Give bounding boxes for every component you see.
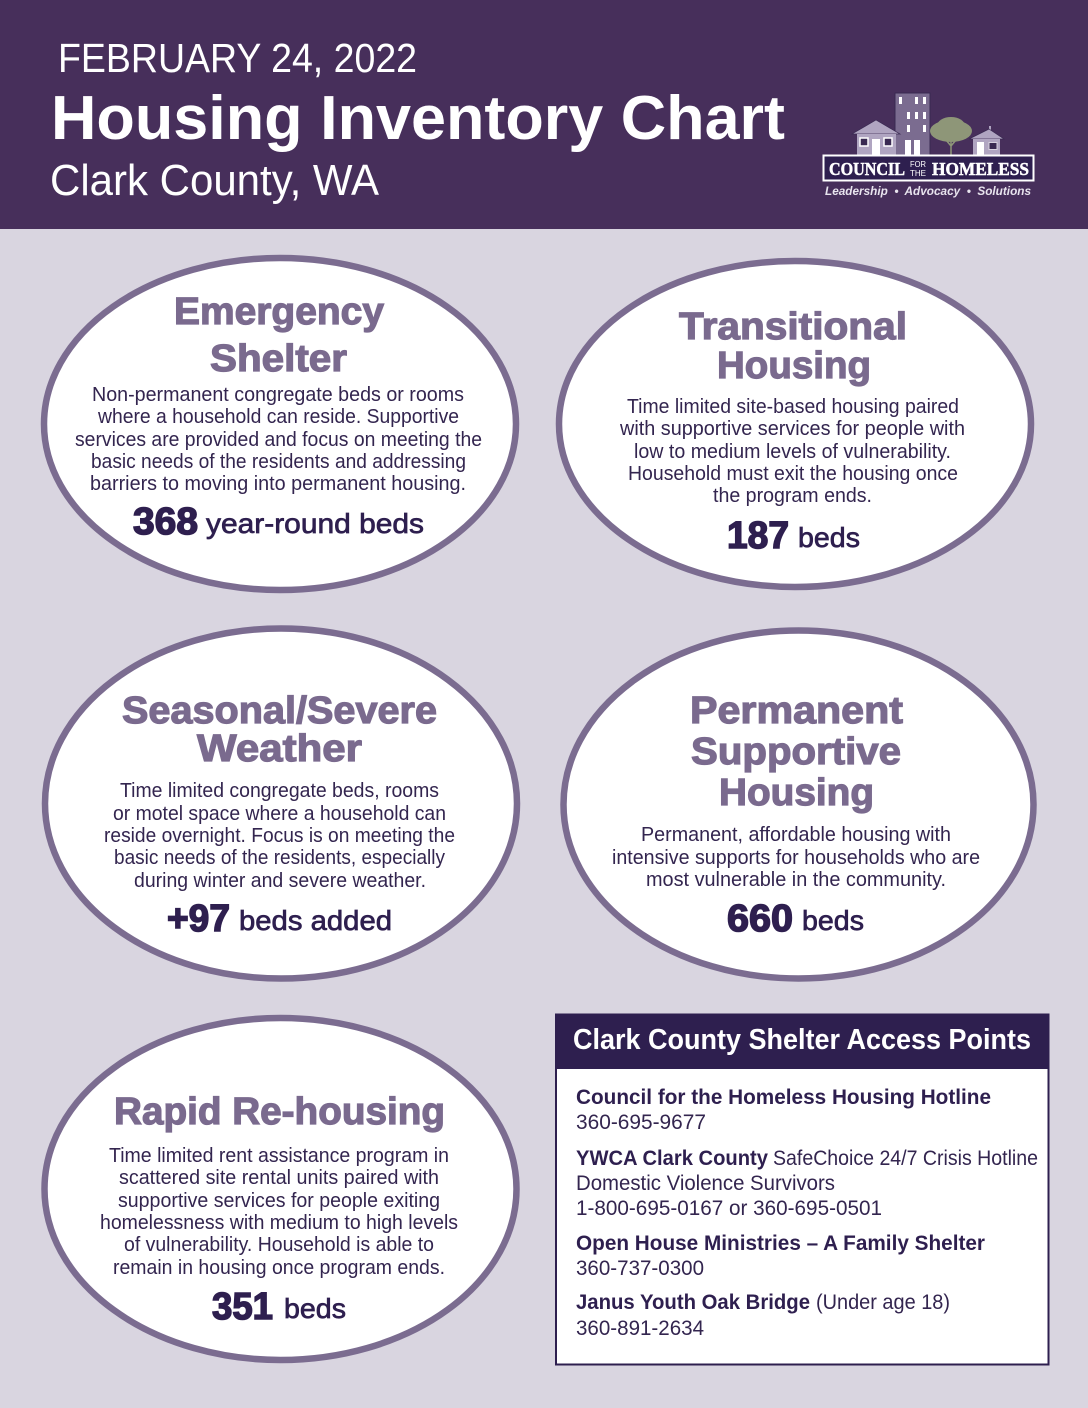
heading: Housing: [717, 345, 871, 387]
contact: Janus Youth Oak Bridge: [576, 1291, 950, 1340]
stat: 187 beds: beds: [798, 522, 860, 553]
description: or motel space where a household can: [113, 803, 446, 825]
panel: Transitional Housing: [559, 261, 1031, 587]
description: supportive services for people exiting: [118, 1190, 440, 1212]
stat: 660 beds: [727, 898, 864, 940]
panel: Emergency Shelter: [44, 258, 516, 590]
logo: Council for the Homeless: [824, 93, 1034, 198]
heading: Weather: [197, 728, 362, 770]
stat: 368 year-round beds: year-round beds: [206, 508, 424, 539]
heading: Transitional: [679, 306, 907, 348]
description: barriers to moving into permanent housing.: [90, 473, 466, 495]
heading: Seasonal/Severe: [122, 690, 437, 732]
description: where a household can reside. Supportive: [97, 406, 459, 428]
stat: 368 year-round beds: 368: [133, 501, 198, 543]
description: basic needs of the residents, especially: [114, 847, 445, 869]
contact: YWCA Clark County: Domestic Violence Survivors: [576, 1172, 835, 1195]
description: the program ends.: [713, 485, 872, 507]
description: [100, 1145, 458, 1279]
description: [104, 780, 455, 892]
contact: Open House Ministries: Open House Ministries – A Family Shelter: [576, 1232, 985, 1255]
description: [612, 824, 980, 891]
logo banner: COUNCIL: [829, 159, 905, 179]
description: reside overnight. Focus is on meeting the: [104, 825, 455, 847]
contact: Council for the Homeless: 360-695-9677: [576, 1111, 706, 1134]
panel: Seasonal/Severe Weather: [45, 628, 517, 978]
contact: Council for the Homeless: Council for the Homeless Housing Hotline: [576, 1086, 991, 1109]
heading: [690, 690, 903, 814]
contact: YWCA Clark County: 1-800-695-0167 or 360-695-0501: [576, 1197, 882, 1220]
description: [75, 384, 482, 495]
description: Non-permanent congregate beds or rooms: [92, 384, 464, 406]
heading: [122, 690, 437, 770]
contact: YWCA Clark County: YWCA Clark County: [576, 1147, 768, 1170]
description: scattered site rental units paired with: [119, 1167, 439, 1189]
heading: Supportive: [691, 731, 901, 773]
stat: +97 beds added: beds added: [239, 905, 392, 936]
stat: 351 beds: 351: [212, 1286, 273, 1328]
stat: 660 beds: 660: [727, 898, 793, 940]
description: Household must exit the housing once: [628, 463, 958, 485]
heading: [679, 306, 907, 387]
stat: 187 beds: [727, 515, 860, 557]
stat: 368 year-round beds: [133, 501, 424, 543]
heading: Emergency: [174, 291, 384, 333]
panel: Permanent Supportive Housing: [564, 630, 1034, 978]
description: basic needs of the residents and addressing: [91, 451, 466, 473]
contact: YWCA Clark County: SafeChoice 24/7 Crisis Hotline: [773, 1147, 1038, 1170]
panel: Clark County Shelter Access Points: [555, 1014, 1050, 1364]
panel header: [555, 1014, 1050, 1069]
heading: Housing: [719, 772, 874, 814]
icon: apartment building: [895, 93, 930, 156]
description: remain in housing once program ends.: [113, 1257, 445, 1279]
stat: +97 beds added: [167, 898, 392, 940]
description: of vulnerability. Household is able to: [124, 1234, 434, 1256]
contact: Janus Youth Oak Bridge: (Under age 18): [816, 1291, 950, 1314]
logo banner: HOMELESS: [932, 159, 1029, 179]
icon: tree: [930, 117, 972, 156]
contact: Open House Ministries: [576, 1232, 985, 1280]
contact: Council for the Homeless: [576, 1086, 991, 1134]
header band: [0, 0, 1088, 229]
contact: Janus Youth Oak Bridge: Janus Youth Oak Bridge: [576, 1291, 810, 1314]
date line: FEBRUARY 24, 2022: [58, 35, 417, 81]
title: Housing Inventory Chart: [51, 84, 785, 153]
logo tagline: Leadership • Advocacy • Solutions: [825, 184, 1031, 198]
stat: 351 beds: [212, 1286, 346, 1328]
contact: YWCA Clark County: [576, 1147, 1038, 1220]
contact: Open House Ministries: 360-737-0300: [576, 1257, 704, 1280]
description: with supportive services for people with: [619, 418, 965, 440]
description: low to medium levels of vulnerability.: [634, 441, 951, 463]
description: intensive supports for households who are: [612, 847, 980, 869]
description: most vulnerable in the community.: [646, 869, 946, 891]
stat: 351 beds: beds: [284, 1293, 346, 1324]
stat: 660 beds: beds: [802, 905, 864, 936]
icon: right house: [969, 126, 1004, 156]
heading: Permanent: [690, 690, 903, 732]
description: Time limited congregate beds, rooms: [120, 780, 439, 802]
stat: +97 beds added: +97: [167, 898, 230, 940]
logo banner: FOR: [910, 160, 926, 169]
stat: 187 beds: 187: [727, 515, 789, 557]
description: Time limited rent assistance program in: [109, 1145, 449, 1167]
heading: Rapid Re-housing: [114, 1091, 445, 1133]
icon: left house: [852, 120, 900, 156]
description: homelessness with medium to high levels: [100, 1212, 458, 1234]
description: services are provided and focus on meeting the: [75, 429, 482, 451]
panel header: Clark County Shelter Access Points: [573, 1024, 1031, 1056]
subtitle: Clark County, WA: [50, 156, 380, 205]
heading: Shelter: [210, 338, 347, 380]
panel: Rapid Re-housing: [44, 1018, 516, 1360]
description: Permanent, affordable housing with: [641, 824, 951, 846]
logo banner: [824, 156, 1034, 180]
description: Time limited site-based housing paired: [627, 396, 959, 418]
contact: Janus Youth Oak Bridge: 360-891-2634: [576, 1317, 704, 1340]
description: during winter and severe weather.: [134, 870, 426, 892]
description: [619, 396, 965, 507]
logo banner: THE: [910, 169, 926, 178]
heading: [174, 291, 384, 380]
